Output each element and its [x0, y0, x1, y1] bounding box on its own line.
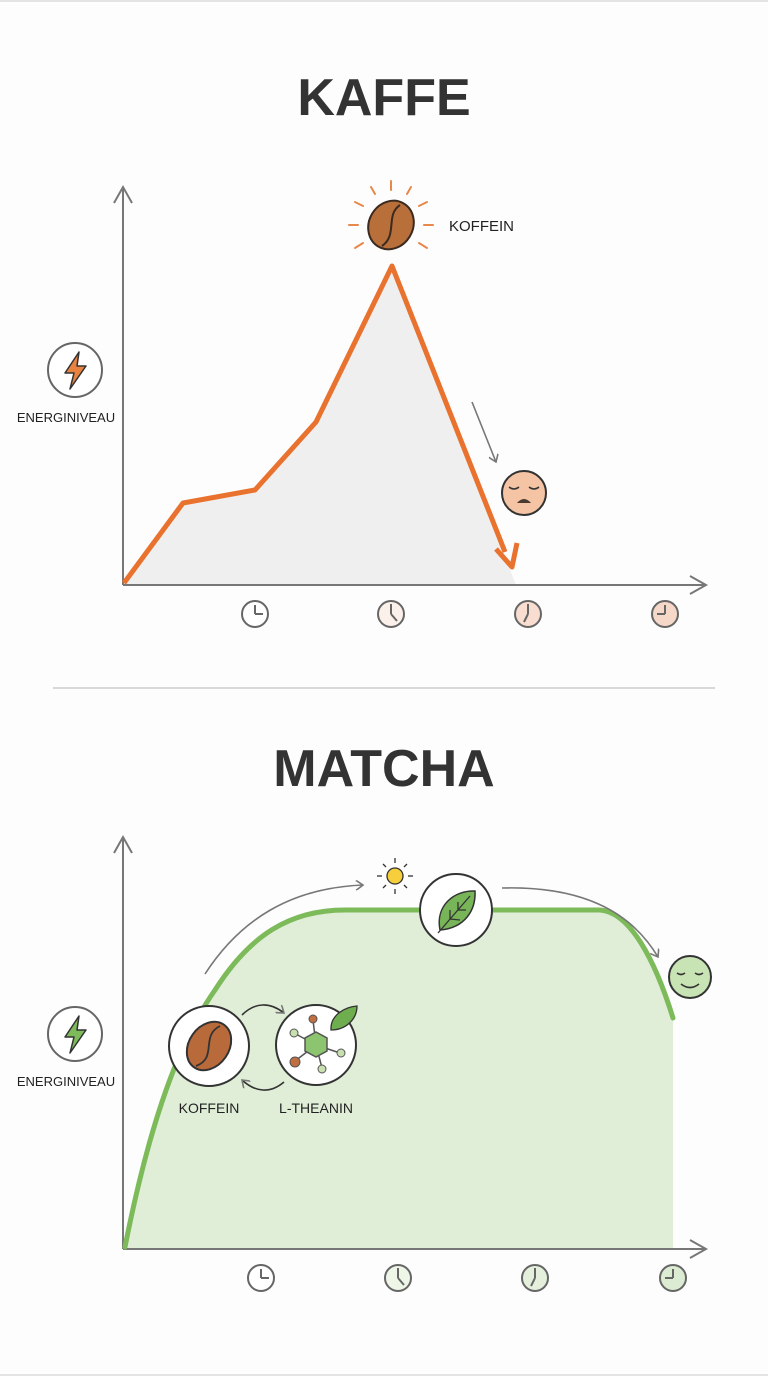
green line [125, 910, 673, 1247]
label: ENERGINIVEAU: ENERGINIVEAU [17, 1074, 115, 1089]
title: MATCHA: MATCHA [273, 740, 495, 798]
area fill [125, 910, 673, 1249]
label: ENERGINIVEAU: ENERGINIVEAU [17, 410, 115, 425]
labels: KOFFEIN [179, 1100, 239, 1116]
icon: L-theanin molecule [276, 1005, 357, 1085]
icon: sun [377, 858, 413, 894]
icon: leaf [420, 874, 492, 946]
icon: energy bolt [48, 343, 102, 397]
title: KAFFE: KAFFE [297, 69, 471, 127]
chart: matcha energy: L-THEANIN [279, 1100, 353, 1116]
icon: tired face [502, 471, 546, 515]
icon: energy bolt green [48, 1007, 102, 1061]
chart: coffee energy [17, 181, 706, 627]
icon: koffein bean [169, 1006, 249, 1086]
arrow: crash [472, 402, 496, 462]
axes [114, 837, 706, 1258]
clocks [248, 1265, 686, 1291]
label: KOFFEIN: KOFFEIN [449, 218, 514, 235]
arrow: descend [502, 888, 658, 957]
arrow: rise [205, 885, 363, 974]
icon: smiling face [669, 956, 711, 998]
axes [114, 187, 706, 594]
orange line [124, 266, 505, 583]
icon: coffee bean with rays [349, 181, 433, 258]
clocks [242, 601, 678, 627]
area fill [123, 265, 516, 585]
arrows: exchange [242, 1005, 284, 1015]
chart: matcha energy [17, 837, 711, 1291]
